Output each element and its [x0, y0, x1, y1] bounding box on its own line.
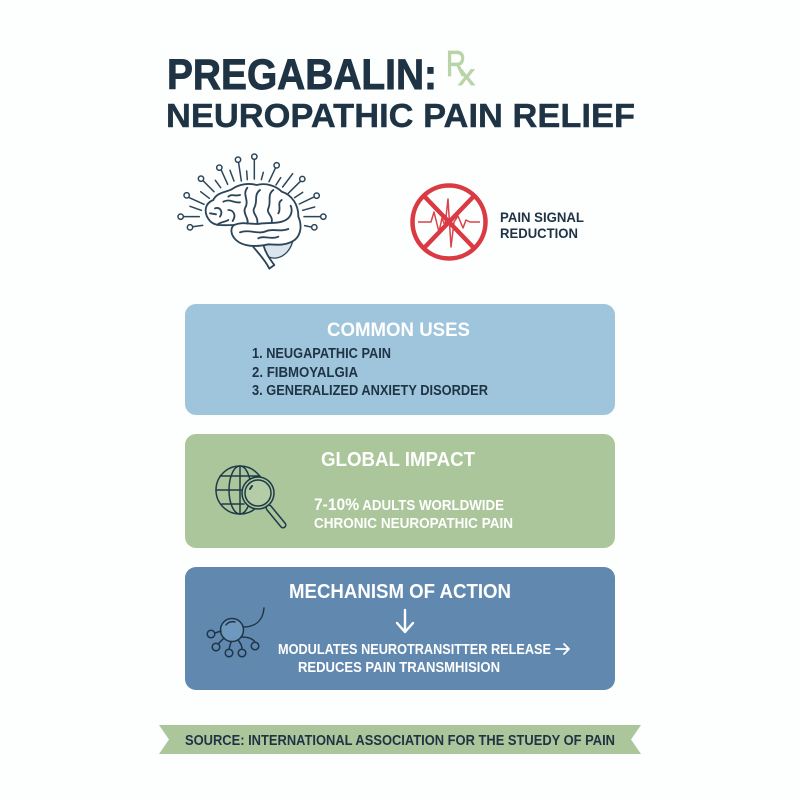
text: pain signal reduction	[500, 209, 584, 241]
stat: adults worldwide: CHRONIC NEUROPATHIC PAIN	[314, 516, 513, 532]
text: pain signal reduction: REDUCTION	[500, 225, 578, 241]
stat: adults worldwide	[314, 495, 513, 532]
arrow: right	[556, 644, 569, 654]
arrow: down	[397, 610, 413, 632]
heading: common uses: COMMON USES	[327, 320, 470, 341]
list: common uses	[252, 346, 488, 399]
panel: common uses	[185, 304, 615, 415]
title: PREGABALIN:	[167, 51, 437, 99]
title	[166, 51, 635, 134]
icon: Rx symbol: R	[446, 43, 466, 84]
list: common uses: 3. GENERALIZED ANXIETY DISORDER	[252, 383, 488, 399]
source ribbon	[159, 725, 641, 754]
icon: globe and magnifying glass	[216, 466, 283, 525]
panel: mechanism of action	[185, 567, 615, 690]
heading: global impact: GLOBAL IMPACT	[321, 449, 475, 471]
icon: pain signal prohibited	[412, 186, 486, 258]
stat: adults worldwide: 7-10% ADULTS WORLDWIDE	[314, 495, 504, 514]
text: mechanism description: MODULATES NEUROTRANSITTER RELEASE	[278, 642, 551, 658]
title: NEUROPATHIC PAIN RELIEF	[166, 97, 635, 134]
text: mechanism description: REDUCES PAIN TRANSMHISION	[298, 660, 500, 676]
panel: global impact	[185, 434, 615, 548]
source ribbon: SOURCE: INTERNATIONAL ASSOCIATION FOR THE STUEDY OF PAIN	[185, 733, 615, 749]
icon: neuron	[207, 608, 264, 657]
text: pain signal reduction: PAIN SIGNAL	[500, 209, 584, 225]
text: mechanism description	[278, 642, 551, 676]
heading: mechanism of action: MECHANISM OF ACTION	[289, 581, 511, 603]
icon: brain with radiating nerve signals	[178, 154, 326, 269]
icon: Rx symbol: x	[458, 59, 475, 92]
list: common uses: 2. FIBMOYALGIA	[252, 365, 358, 381]
list: common uses: 1. NEUGAPATHIC PAIN	[252, 346, 391, 362]
